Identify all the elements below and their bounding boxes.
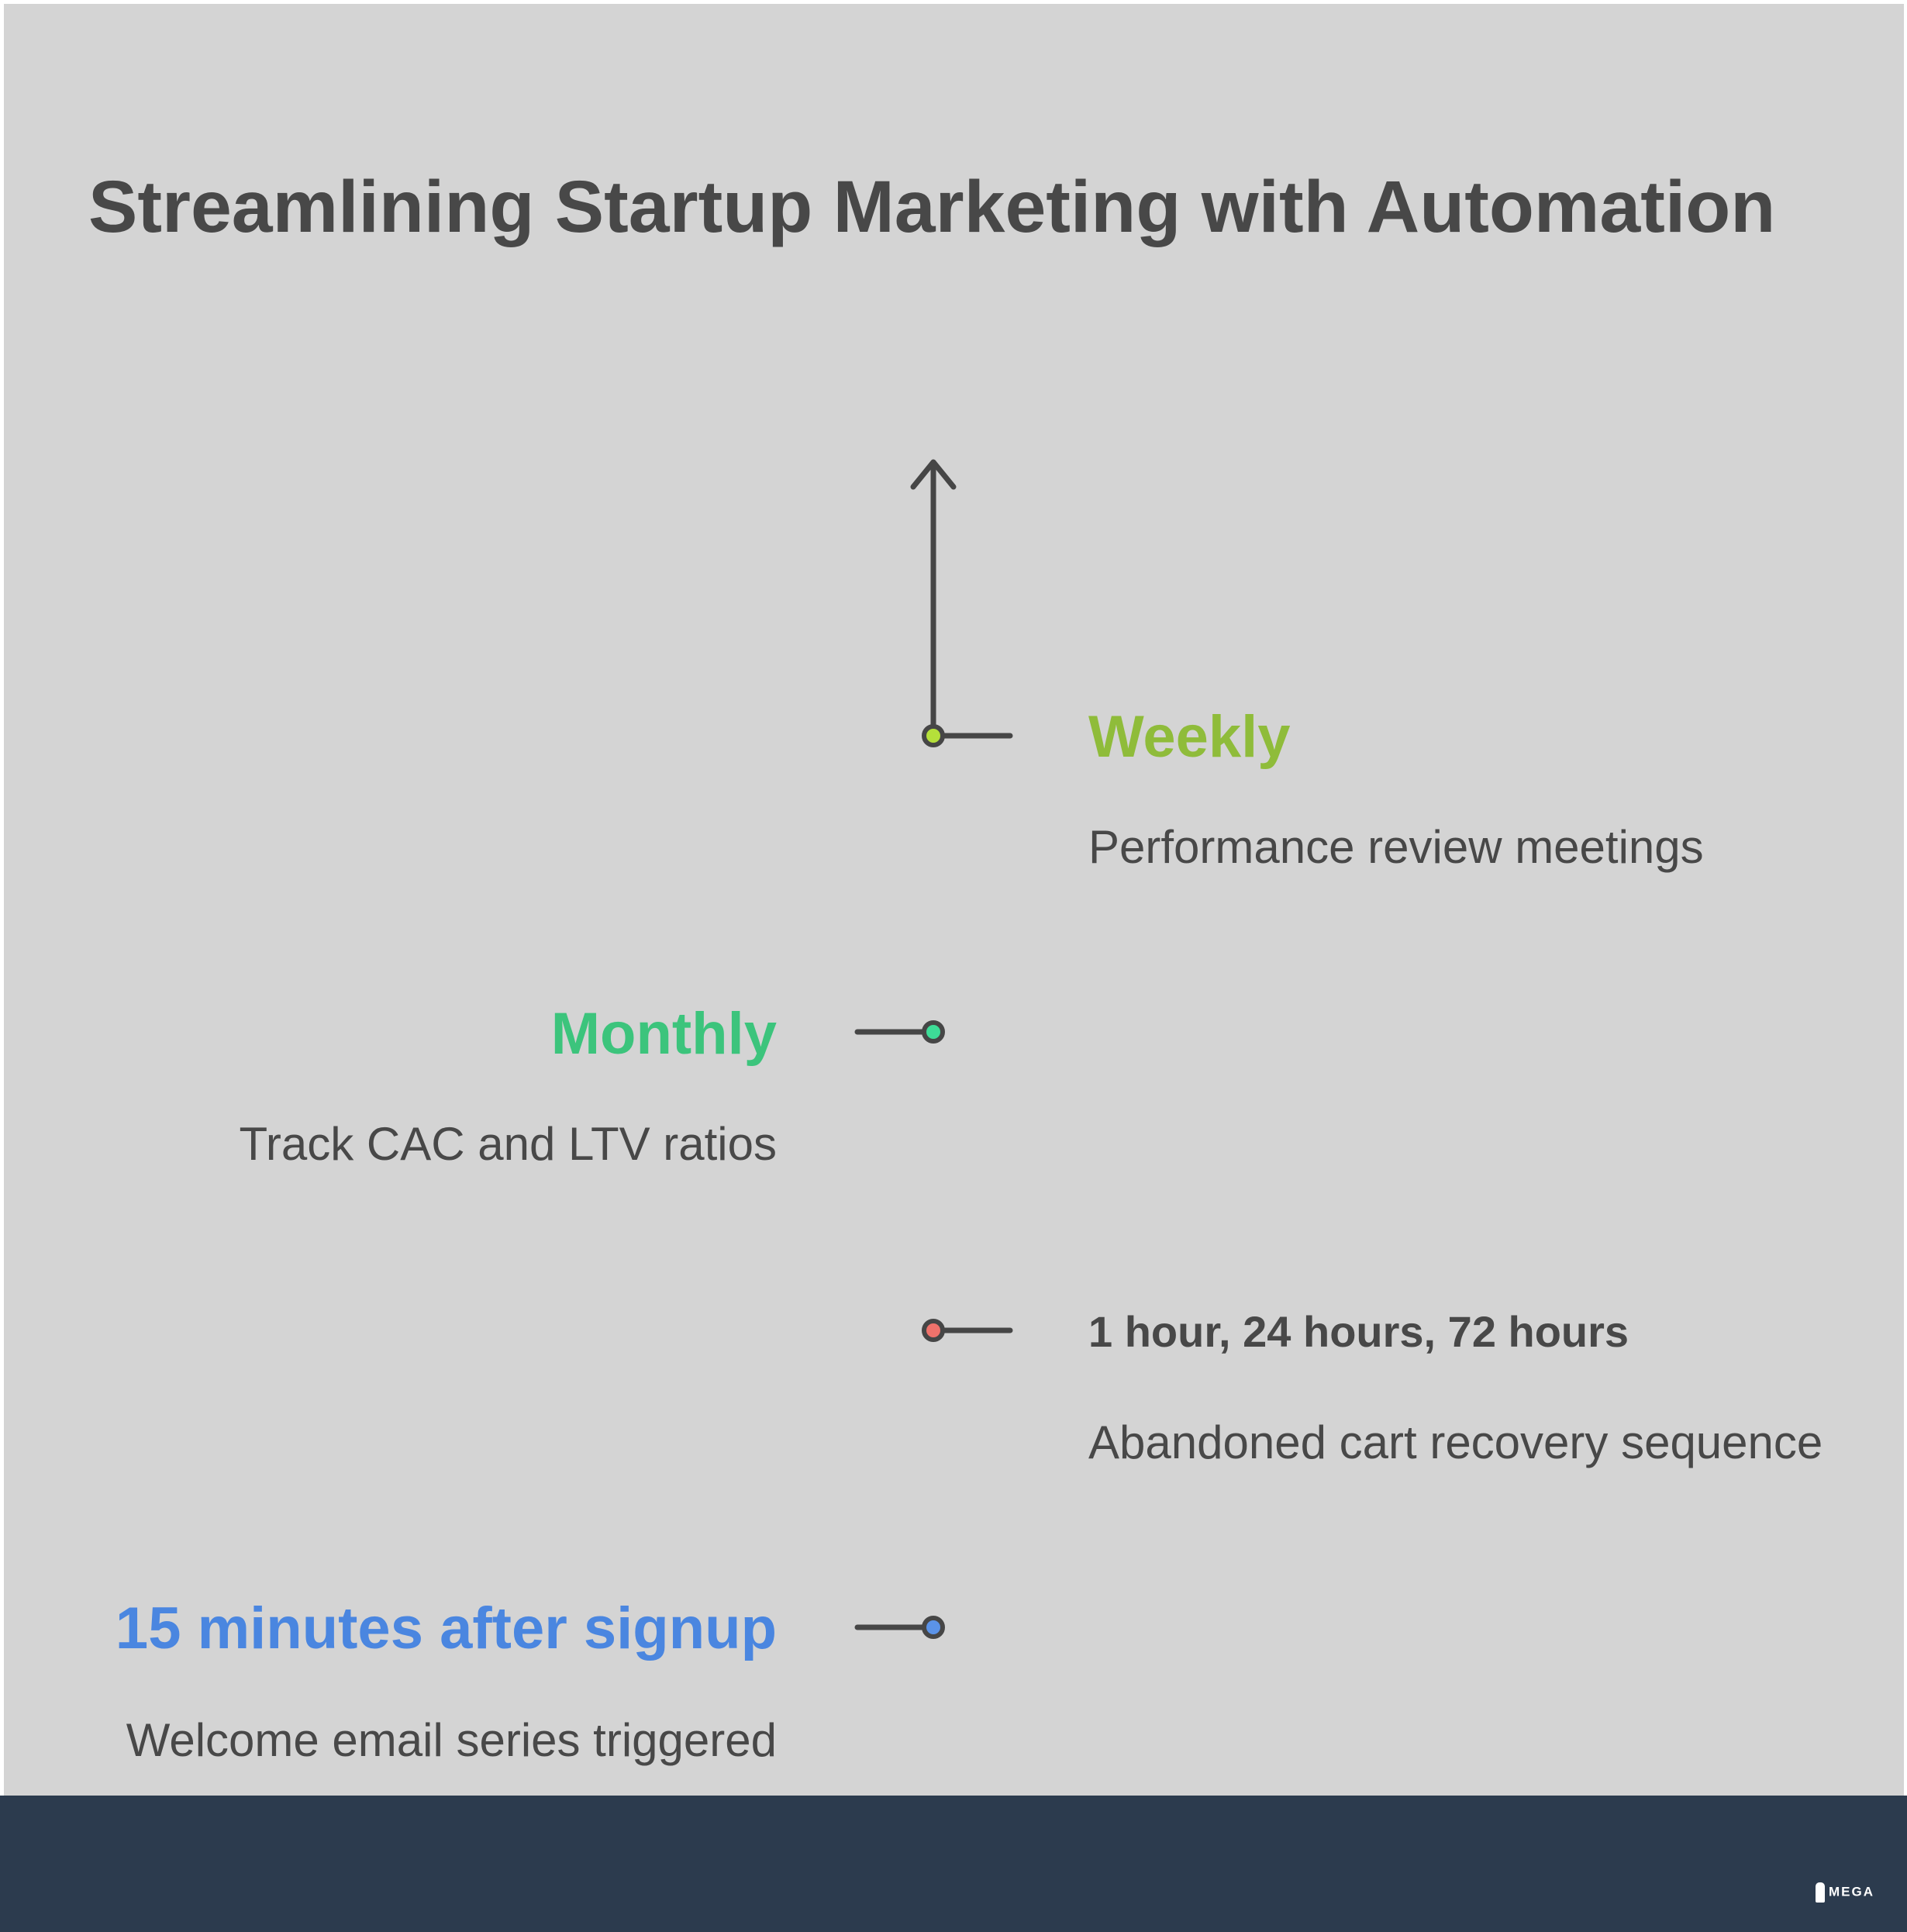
marker: weekly [924, 726, 1010, 745]
text: 15 minutes desc: Welcome email series triggered [126, 1714, 777, 1766]
heading: 15 minutes: 15 minutes after signup [116, 1596, 777, 1661]
marker: hours [924, 1321, 1010, 1340]
marker: monthly [857, 1023, 943, 1041]
text: hours desc: Abandoned cart recovery sequence [1088, 1416, 1823, 1468]
logo: MEGA [1829, 1884, 1874, 1899]
arrow: timeline axis [913, 462, 953, 736]
heading: hours: 1 hour, 24 hours, 72 hours [1088, 1307, 1629, 1356]
heading: monthly: Monthly [551, 1001, 777, 1067]
footer [0, 1796, 1907, 1932]
logo [1816, 1882, 1874, 1903]
text: monthly desc: Track CAC and LTV ratios [239, 1118, 777, 1170]
title: Streamlining Startup Marketing with Automation [88, 166, 1775, 248]
text: weekly desc: Performance review meetings [1088, 821, 1704, 873]
marker: 15 minutes [857, 1618, 943, 1637]
heading: weekly: Weekly [1088, 704, 1291, 770]
